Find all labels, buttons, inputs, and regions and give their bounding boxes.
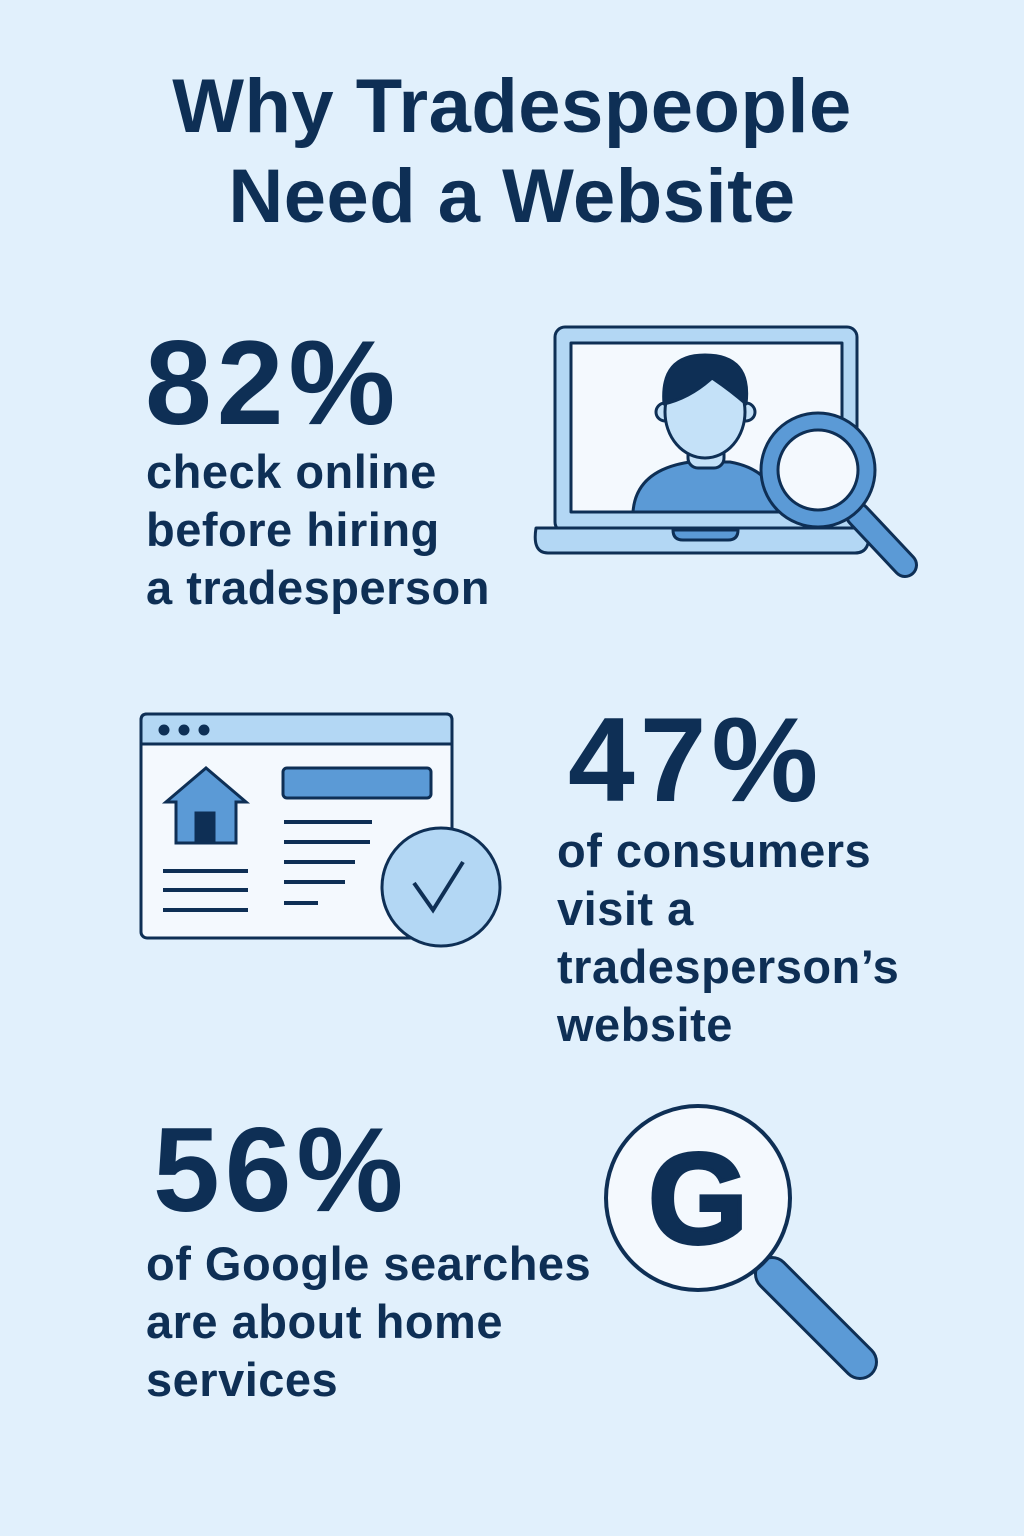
text: of Google searches: [146, 1237, 591, 1406]
title: Why Tradespeople: [172, 64, 852, 149]
text: of consumers: visit a: [557, 882, 694, 935]
text: check online: check online: [146, 445, 437, 498]
text: of consumers: [556, 824, 899, 1051]
text: of Google searches: are about home: [146, 1295, 503, 1348]
text: check online: before hiring: [146, 503, 440, 556]
text: of Google searches: services: [146, 1353, 338, 1406]
text: of consumers: website: [557, 998, 733, 1051]
text: check online: [146, 445, 490, 614]
title: [172, 64, 852, 239]
icon: Google magnifier: G: [648, 1128, 748, 1271]
stat 82%: 82%: [145, 316, 400, 450]
text: of consumers: tradesperson’s: [557, 940, 899, 993]
text: of consumers: of consumers: [557, 824, 871, 877]
title: Need a Website: [228, 154, 796, 239]
stat 56%: 56%: [153, 1103, 408, 1237]
stat 47%: 47%: [568, 693, 823, 827]
text: of Google searches: of Google searches: [146, 1237, 591, 1290]
text: check online: a tradesperson: [146, 561, 490, 614]
